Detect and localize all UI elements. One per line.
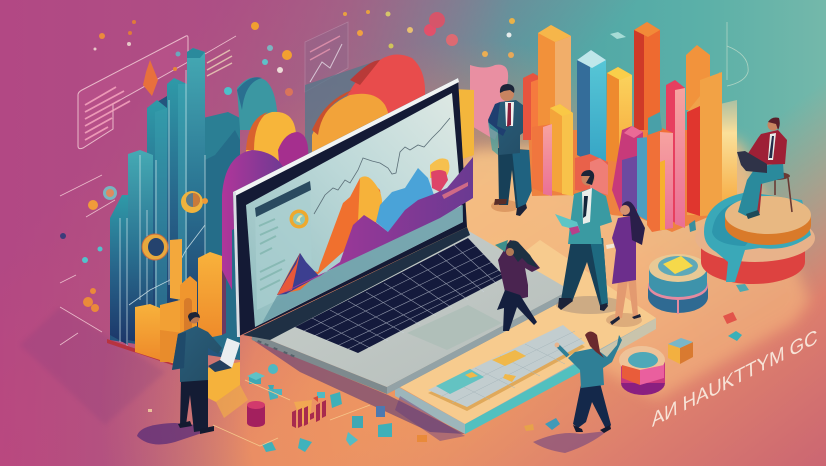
- pedestal with seated man: [695, 118, 815, 292]
- small blocks bottom right: [524, 220, 742, 431]
- tower: yellow: [550, 104, 573, 196]
- laptop screen display: [246, 93, 463, 327]
- laptop screen frame: [233, 78, 470, 340]
- confetti dots: [60, 10, 626, 312]
- tower: glow: [720, 100, 737, 210]
- jacket: [172, 326, 222, 382]
- gold ring badge: [290, 210, 308, 228]
- tower: blue: [577, 50, 606, 185]
- right orange and red towers: [523, 22, 737, 232]
- laptop base: [252, 230, 570, 394]
- tower backing mass: [528, 130, 737, 232]
- crouching figure on laptop: [495, 240, 540, 331]
- seated man torso: [747, 130, 787, 165]
- panel: top-left data card: [60, 36, 236, 345]
- tower: tall orange: [538, 25, 571, 190]
- laptop: [233, 78, 570, 394]
- tower: red small: [575, 154, 608, 195]
- garbled label text: AИ HAUKTTYM GC: [651, 326, 818, 432]
- tower: red left: [523, 73, 542, 140]
- tower: red orange: [634, 22, 660, 130]
- legs: [180, 378, 208, 432]
- tower: pink: [532, 124, 552, 196]
- panel: top-right chart card: [305, 22, 348, 92]
- tower: orange back: [686, 45, 710, 110]
- screen lower band: [262, 205, 463, 323]
- man at bottom left: [137, 312, 248, 444]
- shadow: [137, 423, 205, 444]
- tower: pink tall: [666, 80, 685, 228]
- background blobs behind laptop: [222, 54, 508, 290]
- seated man legs: [738, 163, 784, 216]
- left teal bar chart: [107, 48, 278, 366]
- cylinder with pink wrap: [619, 346, 665, 395]
- mini bar chart icon: [292, 400, 326, 428]
- tower: yellow-orange: [607, 67, 632, 165]
- stacked cylinder near woman: [648, 254, 708, 314]
- tower: big red-orange: [687, 72, 722, 216]
- pedestal teal ring: [704, 192, 811, 282]
- stool: [757, 172, 792, 213]
- yellow box pile: [668, 338, 693, 364]
- line chart on screen: [314, 118, 450, 214]
- glow arcs near right towers: [727, 22, 748, 86]
- woman at bottom: [533, 332, 622, 453]
- floor plane: [400, 140, 810, 400]
- keyboard mat on platform: [428, 325, 585, 411]
- man with tablet: [555, 170, 624, 314]
- small laptop: [208, 338, 240, 372]
- pink cylinder icon: [247, 401, 265, 427]
- ring icons: [103, 186, 208, 260]
- laptop trackpad: [407, 305, 502, 350]
- area chart on screen: [277, 157, 473, 296]
- dashboard side panel: [255, 181, 312, 310]
- platform under laptop: [250, 240, 656, 441]
- seated man laptop: [737, 151, 767, 173]
- laptop keyboard: [295, 238, 505, 353]
- pedestal red base: [695, 214, 815, 284]
- pedestal orange top: [725, 196, 811, 245]
- tower: center cluster: [612, 112, 673, 232]
- left orange bars: [135, 239, 226, 365]
- yellow box: [208, 362, 248, 418]
- woman in purple dress: [606, 201, 645, 327]
- man standing at top: [488, 84, 536, 216]
- floor icons bottom: [148, 364, 427, 452]
